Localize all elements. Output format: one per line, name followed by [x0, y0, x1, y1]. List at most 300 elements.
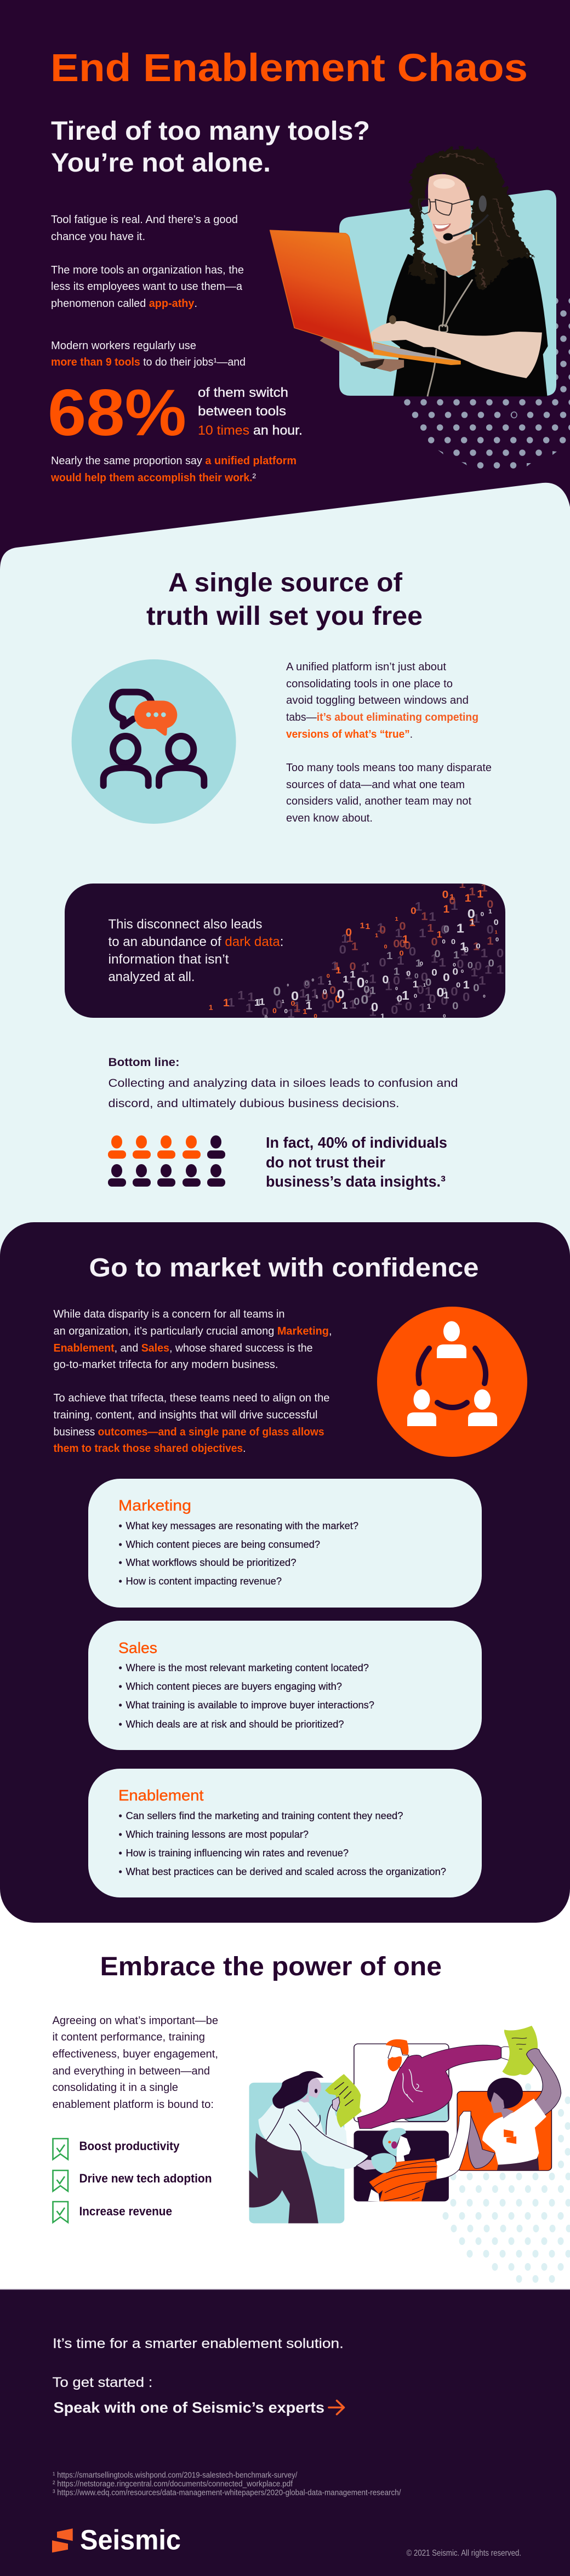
binary data graphic: 0: [443, 971, 450, 984]
binary data graphic: 1: [465, 893, 471, 904]
face: [428, 174, 471, 244]
card: Enablement: [88, 1769, 482, 1897]
binary data graphic: 0: [305, 980, 309, 987]
binary data graphic: 1: [361, 961, 368, 974]
dot pattern: light teal: [446, 2087, 570, 2279]
binary data graphic: 1: [287, 1007, 295, 1020]
binary data graphic: 0: [431, 967, 437, 978]
man: face: [388, 2046, 409, 2068]
afro person: raised arm: [526, 2049, 561, 2118]
binary data graphic: 1: [293, 999, 301, 1013]
bottom person: hair shoulder: [371, 2153, 396, 2173]
woman: blouse folds: [266, 2104, 367, 2154]
card questions: •: [118, 1700, 122, 1711]
binary data graphic: [209, 879, 504, 1020]
card questions: •: [118, 1520, 122, 1531]
stat: 40% do not trust: do not trust their: [266, 1154, 385, 1171]
binary data graphic: 1: [415, 900, 422, 913]
forehead highlight: [434, 179, 455, 189]
binary data graphic: 1: [349, 998, 356, 1011]
binary data graphic: 0: [339, 943, 346, 956]
benefit label: Increase revenue: [79, 2204, 172, 2218]
binary data graphic: 0: [451, 937, 455, 946]
binary data graphic: 0: [391, 1003, 398, 1017]
box: white outlined: [354, 2044, 449, 2122]
card questions: Can sellers find the marketing and training content they need?: [126, 1810, 403, 1821]
binary data graphic: 1: [369, 972, 377, 985]
binary data graphic: 1: [472, 911, 480, 925]
text block: trifecta: [54, 1308, 332, 1455]
binary data graphic: 0: [367, 962, 369, 966]
neck and chest: [435, 234, 475, 276]
binary data graphic: 1: [282, 999, 284, 1004]
binary data graphic: 1: [431, 952, 438, 965]
panel: single source of truth background: [0, 483, 570, 1261]
binary data graphic: 1: [421, 910, 428, 922]
binary data graphic: 0: [327, 998, 334, 1011]
call to action text: It’s time for a smarter enablement solution.: [53, 2336, 344, 2351]
link: speak with experts: Speak with one of Seismic’s experts: [54, 2399, 324, 2416]
card title: Sales: [118, 1639, 157, 1656]
binary data graphic: 1: [328, 980, 332, 987]
earring: [388, 2141, 391, 2144]
text block: unified platform: Nearly the same proportion say a unified platform: [51, 455, 297, 467]
callout text: [109, 917, 284, 984]
binary data graphic: 1: [413, 979, 418, 989]
text block: bottom line: Bottom line:: [109, 1056, 180, 1069]
binary data graphic: 0: [442, 987, 447, 996]
woman: lower hand: [356, 2159, 379, 2170]
binary data graphic: 0: [421, 970, 428, 984]
laptop base: [373, 341, 461, 365]
card questions: What training is available to improve buyer interactions?: [126, 1700, 374, 1711]
binary data graphic: 1: [451, 899, 458, 913]
binary data graphic: 0: [414, 994, 417, 1000]
binary data graphic: 0: [449, 895, 455, 907]
card questions: •: [118, 1719, 122, 1730]
text block: tool fatigue: The more tools an organization has, the: [51, 264, 244, 276]
callout text: This disconnect also leads: [109, 917, 262, 932]
card questions: Which deals are at risk and should be prioritized?: [126, 1719, 344, 1730]
photo: woman with orange laptop: [270, 147, 548, 396]
binary data graphic: 1: [425, 985, 432, 998]
binary data graphic: 0: [494, 918, 499, 927]
binary data graphic: 1: [346, 932, 354, 944]
binary data graphic: 0: [442, 939, 446, 945]
binary data graphic: 0: [384, 944, 387, 950]
call to action text: To get started :: [53, 2375, 152, 2390]
binary data graphic: 1: [316, 994, 318, 1000]
binary data graphic: 0: [272, 1007, 277, 1015]
laptop keyboard side: [374, 343, 460, 361]
afro person: hair: [487, 2078, 523, 2108]
binary data graphic: 1: [427, 1002, 431, 1011]
card title: Enablement: [118, 1787, 204, 1804]
bottom person: ear: [391, 2141, 397, 2148]
binary data graphic: 1: [405, 968, 412, 982]
icon: teal circle: [72, 659, 236, 824]
binary data graphic: 1: [429, 910, 436, 924]
binary data graphic: 1: [477, 888, 483, 900]
binary data graphic: 1: [453, 949, 459, 961]
card questions: [118, 1810, 446, 1877]
binary data graphic: 0: [379, 955, 386, 969]
lower hand: [320, 335, 404, 372]
binary data graphic: 1: [365, 922, 371, 931]
binary data graphic: 0: [414, 972, 419, 980]
binary data graphic: 1: [481, 947, 488, 960]
panel: hero: [48, 47, 570, 484]
stat: 40% do not trust: In fact, 40% of individuals: [266, 1134, 447, 1151]
woman: trousers: [249, 2133, 318, 2224]
card title: Marketing: [118, 1497, 191, 1514]
man: sweater squiggles: [403, 2069, 423, 2102]
binary data graphic: 1: [377, 921, 384, 934]
illustration: team collaborating: [249, 2026, 561, 2224]
binary data graphic: 1: [459, 879, 466, 891]
card questions: •: [118, 1557, 122, 1568]
text block: bottom line: Collecting and analyzing data in siloes leads to confusion and: [109, 1077, 458, 1090]
binary data graphic: 1: [299, 987, 307, 1000]
card questions: •: [118, 1866, 122, 1877]
binary data graphic: 0: [405, 999, 412, 1013]
woman: neck and face: [299, 2077, 321, 2102]
necklace: [428, 270, 472, 396]
binary data graphic: 0: [284, 1008, 288, 1015]
binary data graphic: 1: [375, 933, 378, 939]
panel: hero background: [0, 0, 570, 603]
box: dark: [354, 2130, 449, 2201]
binary data graphic: 0: [481, 911, 484, 918]
text block: bottom line: discord, and ultimately dubious business decisions.: [109, 1097, 399, 1110]
binary data graphic: 0: [371, 1000, 378, 1014]
man: sweater: [357, 2045, 501, 2129]
afro person: t-shirt: [482, 2099, 546, 2165]
binary data graphic: 1: [471, 966, 478, 979]
text block: unified platform: Too many tools means too many disparate: [286, 762, 492, 774]
card questions: How is content impacting revenue?: [126, 1576, 282, 1587]
stat: 40% do not trust: [266, 1134, 447, 1190]
binary data graphic: 1: [386, 950, 393, 962]
binary data graphic: 1: [460, 944, 468, 958]
text block: tool fatigue: Modern workers regularly use: [51, 340, 196, 352]
woman: mouth: [315, 2089, 317, 2093]
text block: switching stat: [198, 385, 303, 438]
panel: single source of truth: [65, 568, 505, 1190]
binary data graphic: 0: [275, 998, 283, 1011]
card questions: [118, 1662, 374, 1730]
callout text: to an abundance of dark data:: [109, 934, 284, 949]
card questions: How is training influencing win rates and revenue?: [126, 1848, 349, 1859]
binary data graphic: 0: [429, 992, 436, 1006]
text block: bottom line: [109, 1056, 458, 1110]
binary data graphic: 0: [399, 920, 406, 932]
card questions: •: [118, 1848, 122, 1859]
binary data graphic: 1: [487, 935, 494, 947]
binary data graphic: 1: [470, 919, 474, 926]
text block: tool fatigue: more than 9 tools to do their jobs¹—and: [51, 356, 246, 368]
smile: [433, 224, 451, 232]
text block: trifecta: them to track those shared objectives.: [54, 1443, 246, 1455]
callout: dark data pill: [65, 879, 505, 1020]
panel: embrace the power of one: [53, 1952, 570, 2279]
text block: agreeing: [53, 2015, 218, 2111]
binary data graphic: 1: [419, 926, 426, 940]
binary data graphic: 1: [351, 941, 358, 953]
binary data graphic: 0: [453, 962, 456, 968]
subheading: [51, 117, 370, 178]
binary data graphic: 0: [461, 968, 464, 974]
text block: unified platform: [50, 455, 297, 484]
hair: [408, 147, 533, 290]
binary data graphic: 1: [305, 992, 311, 1004]
card questions: Which training lessons are most popular?: [126, 1829, 309, 1840]
logo on t-shirt: [504, 2129, 516, 2144]
panel: footer: [0, 2289, 570, 2576]
binary data graphic: 0: [399, 938, 406, 950]
text block: trifecta: training, content, and insights that will drive successful: [54, 1409, 318, 1421]
dot pattern partials: [438, 450, 557, 466]
hair strands: [420, 155, 510, 287]
black top: [384, 252, 548, 396]
big number: 68%: 68%: [48, 376, 186, 449]
binary data graphic: 0: [314, 1013, 317, 1019]
binary data graphic: 0: [425, 977, 431, 988]
binary data graphic: 0: [361, 993, 368, 1007]
binary data graphic: 0: [475, 959, 482, 973]
text block: unified platform: would help them accomplish their work.²: [50, 472, 256, 484]
binary data graphic: 0: [417, 983, 424, 996]
binary data graphic: 1: [305, 1000, 312, 1012]
text block: unified platform: [286, 661, 492, 824]
binary data graphic: 0: [420, 961, 423, 967]
binary data graphic: 0: [382, 974, 389, 986]
binary data graphic: 0: [323, 988, 327, 996]
text block: tool fatigue: [51, 214, 246, 368]
icon: people with speech bubbles: [104, 692, 204, 785]
text block: tool fatigue: Tool fatigue is real. And there’s a good: [51, 214, 238, 226]
earring: [476, 232, 480, 245]
binary data graphic: 1: [385, 979, 392, 993]
binary data graphic: 0: [409, 944, 416, 958]
binary data graphic: 1: [478, 974, 486, 987]
text block: agreeing: enablement platform is bound to:: [53, 2099, 214, 2111]
binary data graphic: 0: [365, 987, 372, 1000]
card questions: •: [118, 1539, 122, 1550]
binary data graphic: 0: [303, 977, 311, 991]
afro person: face: [491, 2094, 514, 2118]
man: hair: [386, 2039, 409, 2055]
card questions: Which content pieces are buyers engaging with?: [126, 1681, 342, 1692]
binary data graphic: 0: [329, 984, 336, 996]
binary data graphic: 0: [287, 984, 289, 987]
callout text: analyzed at all.: [109, 970, 195, 984]
binary data graphic: 0: [495, 937, 499, 943]
binary data graphic: 1: [335, 965, 341, 976]
binary data graphic: 1: [333, 961, 340, 973]
binary data graphic: 0: [473, 982, 480, 994]
man: beard: [387, 2056, 402, 2071]
binary data graphic: 0: [476, 942, 481, 950]
binary data graphic: 0: [497, 947, 504, 960]
binary data graphic: 0: [379, 924, 386, 936]
text block: trifecta: To achieve that trifecta, these teams need to align on the: [54, 1392, 330, 1404]
bottom person: face: [396, 2136, 411, 2162]
binary data graphic: 1: [209, 1004, 213, 1012]
card questions: Where is the most relevant marketing content located?: [126, 1662, 369, 1673]
top stripes: [373, 2161, 437, 2201]
binary data graphic: 1: [419, 1001, 426, 1015]
binary data graphic: 1: [380, 1012, 385, 1020]
footnotes: ³ https://www.edq.com/resources/data-management-whitepapers/2020-global-data-management-research/: [53, 2488, 401, 2497]
binary data graphic: 0: [261, 1005, 269, 1018]
heading: [146, 568, 423, 631]
binary data graphic: 0: [393, 974, 400, 987]
bottom person: white lower sleeve: [368, 2189, 380, 2201]
bottom person: orange striped top: [369, 2158, 437, 2201]
heading: truth will set you free: [146, 602, 423, 631]
text block: trifecta: While data disparity is a concern for all teams in: [54, 1308, 285, 1320]
binary data graphic: 0: [468, 960, 473, 970]
text block: unified platform: consolidating tools in one place to: [286, 678, 453, 690]
binary data graphic: 1: [497, 963, 504, 976]
binary data graphic: 0: [357, 976, 365, 990]
binary data graphic: 1: [415, 958, 421, 969]
binary data graphic: 0: [434, 948, 441, 960]
binary data graphic: 0: [443, 924, 449, 935]
binary data graphic: 0: [404, 939, 411, 951]
glasses: [419, 199, 471, 215]
heading: A single source of: [168, 568, 403, 597]
icon array: 4 of 10 people in orange: [108, 1136, 225, 1187]
binary data graphic: 1: [256, 998, 261, 1007]
binary data graphic: 1: [254, 998, 260, 1008]
text block: switching stat: of them switch: [198, 385, 288, 400]
text block: agreeing: and everything in between—and: [53, 2065, 210, 2077]
binary data graphic: 1: [437, 929, 442, 939]
binary data graphic: 0: [291, 1000, 295, 1007]
binary data graphic: 0: [400, 949, 404, 957]
arrow: [329, 2401, 344, 2414]
binary data graphic: 1: [347, 979, 355, 993]
card questions: What key messages are resonating with the market?: [126, 1520, 358, 1531]
binary data graphic: 1: [223, 998, 230, 1009]
card questions: •: [118, 1829, 122, 1840]
woman: hand on paper: [332, 2097, 340, 2111]
binary data graphic: 1: [259, 996, 265, 1007]
panel: white section background: [0, 1863, 570, 2289]
text block: unified platform: sources of data—and what one team: [286, 779, 465, 791]
text block: trifecta: go-to-market trifecta for any modern business.: [54, 1359, 278, 1371]
text block: trifecta: an organization, it’s particularly crucial among Marketing,: [54, 1325, 332, 1337]
binary data graphic: 0: [487, 922, 494, 936]
box: teal: [249, 2083, 344, 2224]
heading: Go to market with confidence: [89, 1253, 479, 1283]
headset: [443, 196, 488, 241]
icon: check bookmark: [53, 2170, 68, 2191]
binary data graphic: 0: [354, 996, 360, 1007]
paper: left green: [325, 2074, 362, 2128]
stat: 40% do not trust: business’s data insights.³: [266, 1173, 446, 1190]
icon: team circle: [377, 1307, 527, 1457]
binary data graphic: 0: [365, 979, 368, 984]
card: Sales: [88, 1621, 482, 1750]
teal panel behind photo: [339, 190, 556, 396]
text block: unified platform: even know about.: [286, 812, 373, 824]
binary data graphic: 0: [291, 989, 299, 1004]
binary data graphic: 1: [395, 926, 402, 940]
binary data graphic: 0: [464, 945, 469, 954]
binary data graphic: 0: [436, 985, 444, 1000]
benefit label: Drive new tech adoption: [79, 2172, 212, 2185]
binary data graphic: 1: [360, 921, 365, 930]
binary data graphic: 1: [394, 966, 400, 977]
forearm and hand: [371, 321, 542, 378]
footnotes: ¹ https://smartsellingtools.wishpond.com/2019-salestech-benchmark-survey/: [53, 2471, 298, 2480]
binary data graphic: 1: [395, 916, 398, 922]
binary data graphic: 1: [443, 904, 449, 915]
binary data graphic: 1: [343, 974, 349, 984]
binary data graphic: 1: [402, 934, 409, 945]
binary data graphic: 0: [487, 898, 493, 910]
card: Marketing: [88, 1479, 482, 1608]
icon: check bookmark: [53, 2139, 68, 2159]
binary data graphic: 1: [227, 996, 235, 1009]
heading: Embrace the power of one: [100, 1952, 442, 1981]
panel: go to market: [0, 1222, 570, 1923]
card questions: •: [118, 1810, 122, 1821]
binary data graphic: 0: [468, 907, 475, 921]
subheading: Tired of too many tools?: [51, 117, 370, 146]
afro person: trousers: [497, 2157, 539, 2170]
binary data graphic: 0: [406, 969, 411, 978]
binary data graphic: 1: [342, 1000, 347, 1011]
logo: Seismic: Seismic: [80, 2524, 181, 2555]
card questions: Which content pieces are being consumed?: [126, 1539, 320, 1550]
binary data graphic: 1: [369, 985, 376, 996]
decorative edge: [0, 2289, 570, 2290]
teeth: [434, 224, 449, 229]
binary data graphic: 0: [443, 1013, 446, 1019]
binary data graphic: 0: [265, 1015, 267, 1019]
watch: [360, 359, 384, 369]
binary data graphic: 1: [423, 982, 426, 988]
afro person: lower arm: [468, 2115, 495, 2168]
text block: tool fatigue: chance you have it.: [51, 231, 145, 243]
binary data graphic: 1: [247, 990, 255, 1004]
teal wedge: [405, 2102, 448, 2121]
callout text: information that isn’t: [109, 952, 229, 967]
binary data graphic: 0: [457, 958, 464, 971]
laptop lid: [270, 230, 374, 352]
binary data graphic: 0: [442, 889, 448, 901]
binary data graphic: 0: [441, 922, 448, 936]
binary data graphic: 1: [294, 1002, 300, 1015]
text block: tool fatigue: less its employees want to use them—a: [51, 281, 243, 293]
binary data graphic: 1: [321, 1001, 329, 1015]
binary data graphic: 1: [402, 989, 409, 1003]
binary data graphic: 0: [349, 961, 356, 973]
binary data graphic: 0: [322, 990, 328, 1002]
binary data graphic: 0: [441, 994, 448, 1007]
binary data graphic: 1: [460, 941, 467, 953]
text block: agreeing: Agreeing on what’s important—be: [53, 2015, 218, 2027]
binary data graphic: 0: [327, 973, 330, 979]
card questions: •: [118, 1662, 122, 1673]
card questions: What workflows should be prioritized?: [126, 1557, 296, 1568]
binary data graphic: 0: [363, 984, 370, 995]
text block: unified platform: considers valid, another team may not: [286, 795, 471, 807]
